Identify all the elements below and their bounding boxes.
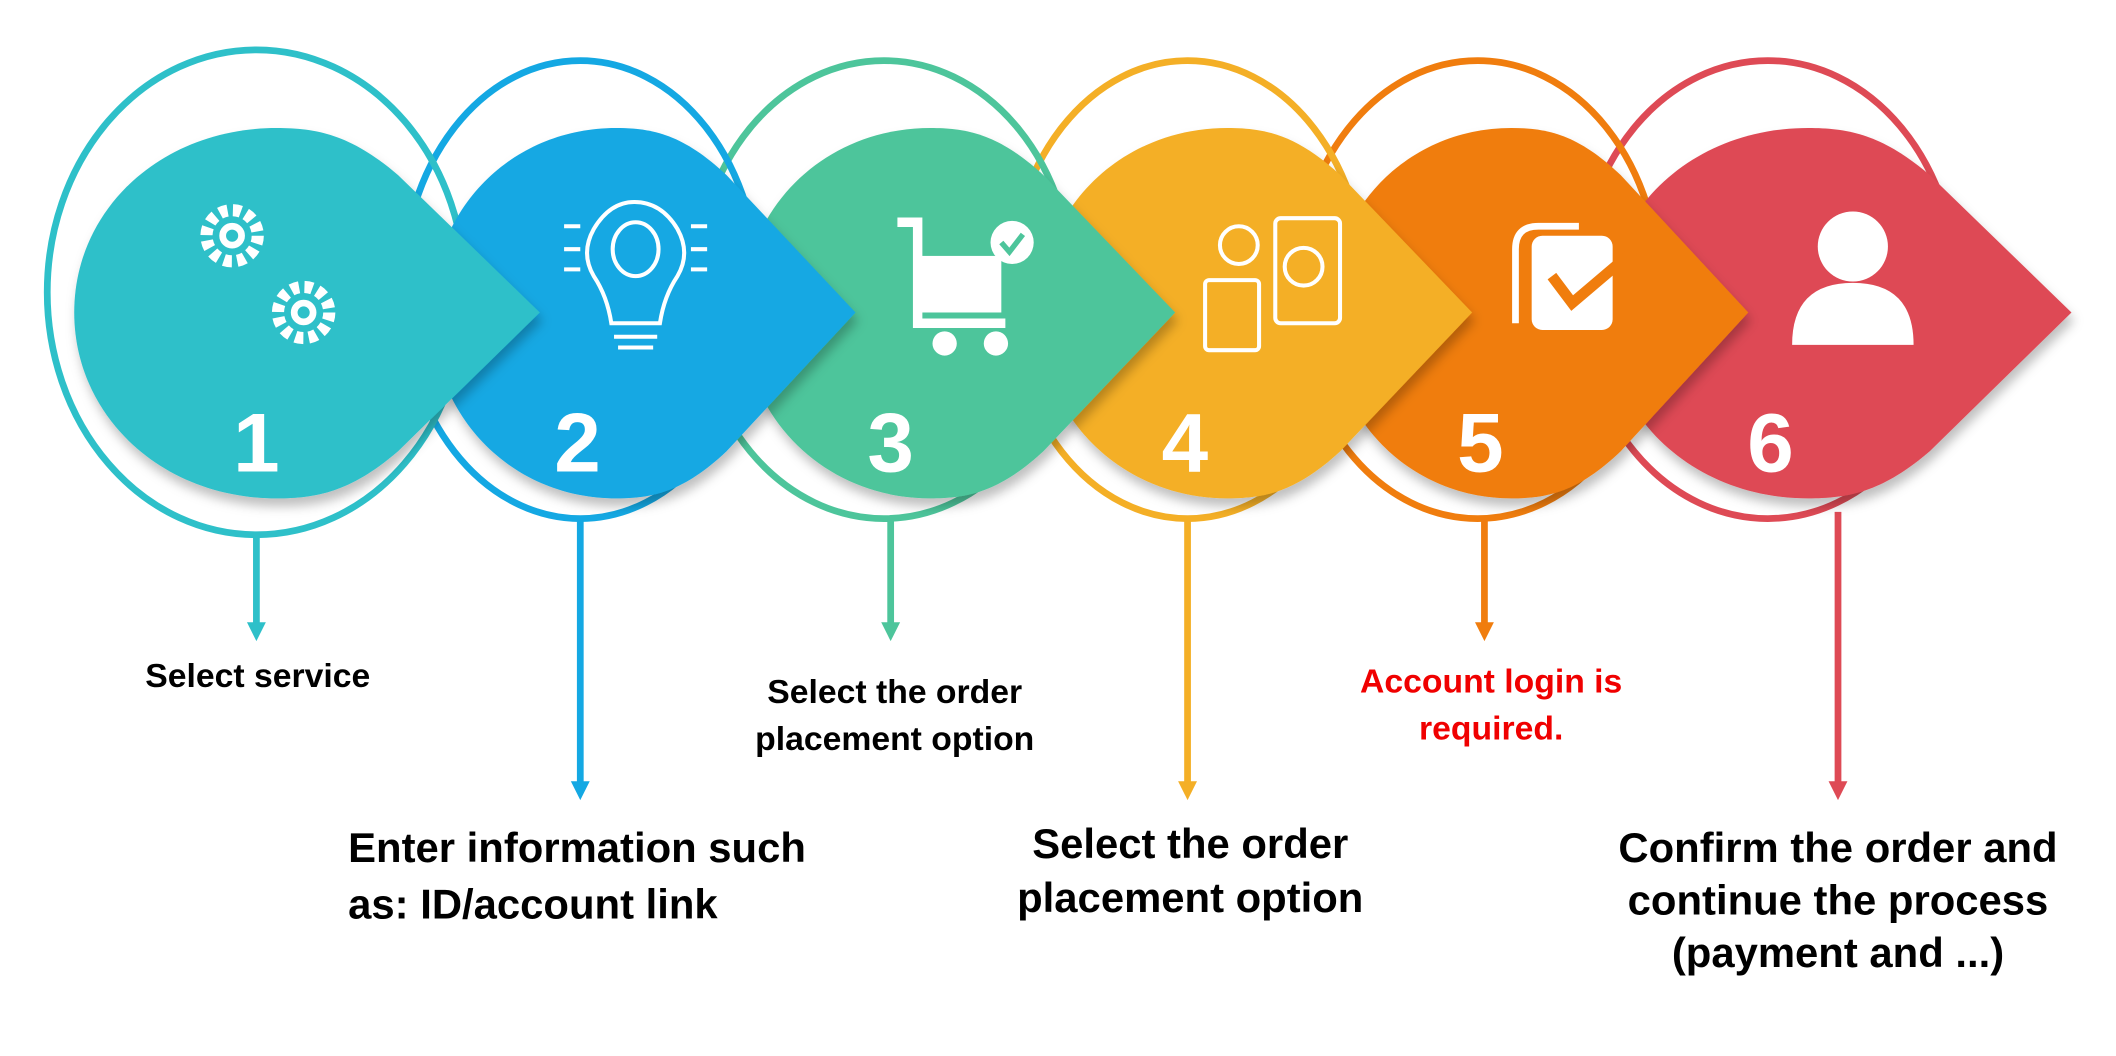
label 1: Select service (145, 657, 370, 695)
label 4: placement option (1017, 874, 1363, 921)
label 5: required. (1419, 709, 1563, 747)
step 2 shape (432, 128, 856, 498)
step 1 shape (74, 128, 540, 498)
step 6 shape (1606, 128, 2071, 498)
label 2: Enter information such (348, 824, 806, 871)
step 3 shape: 3 (867, 396, 914, 489)
step 1 shape: 1 (233, 396, 280, 489)
connector arrows (247, 512, 1847, 800)
label 3: Select the order (767, 673, 1022, 711)
step 6 shape: 6 (1747, 396, 1794, 489)
step 2 shape: 2 (554, 396, 601, 489)
label 6: Confirm the order and (1618, 824, 2058, 871)
step 4 shape: 4 (1162, 396, 1209, 489)
label 2: as: ID/account link (348, 881, 718, 928)
label 6: continue the process (1628, 877, 2048, 924)
step 3 shape (742, 128, 1175, 498)
label 4: Select the order (1032, 820, 1348, 867)
step 5 shape (1329, 128, 1748, 498)
label 6: (payment and ...) (1672, 929, 2004, 976)
step 4 shape (1039, 128, 1472, 498)
rings (47, 50, 1957, 535)
label 5: Account login is (1360, 662, 1622, 700)
step 5 shape: 5 (1457, 396, 1504, 489)
label 3: placement option (755, 720, 1034, 758)
